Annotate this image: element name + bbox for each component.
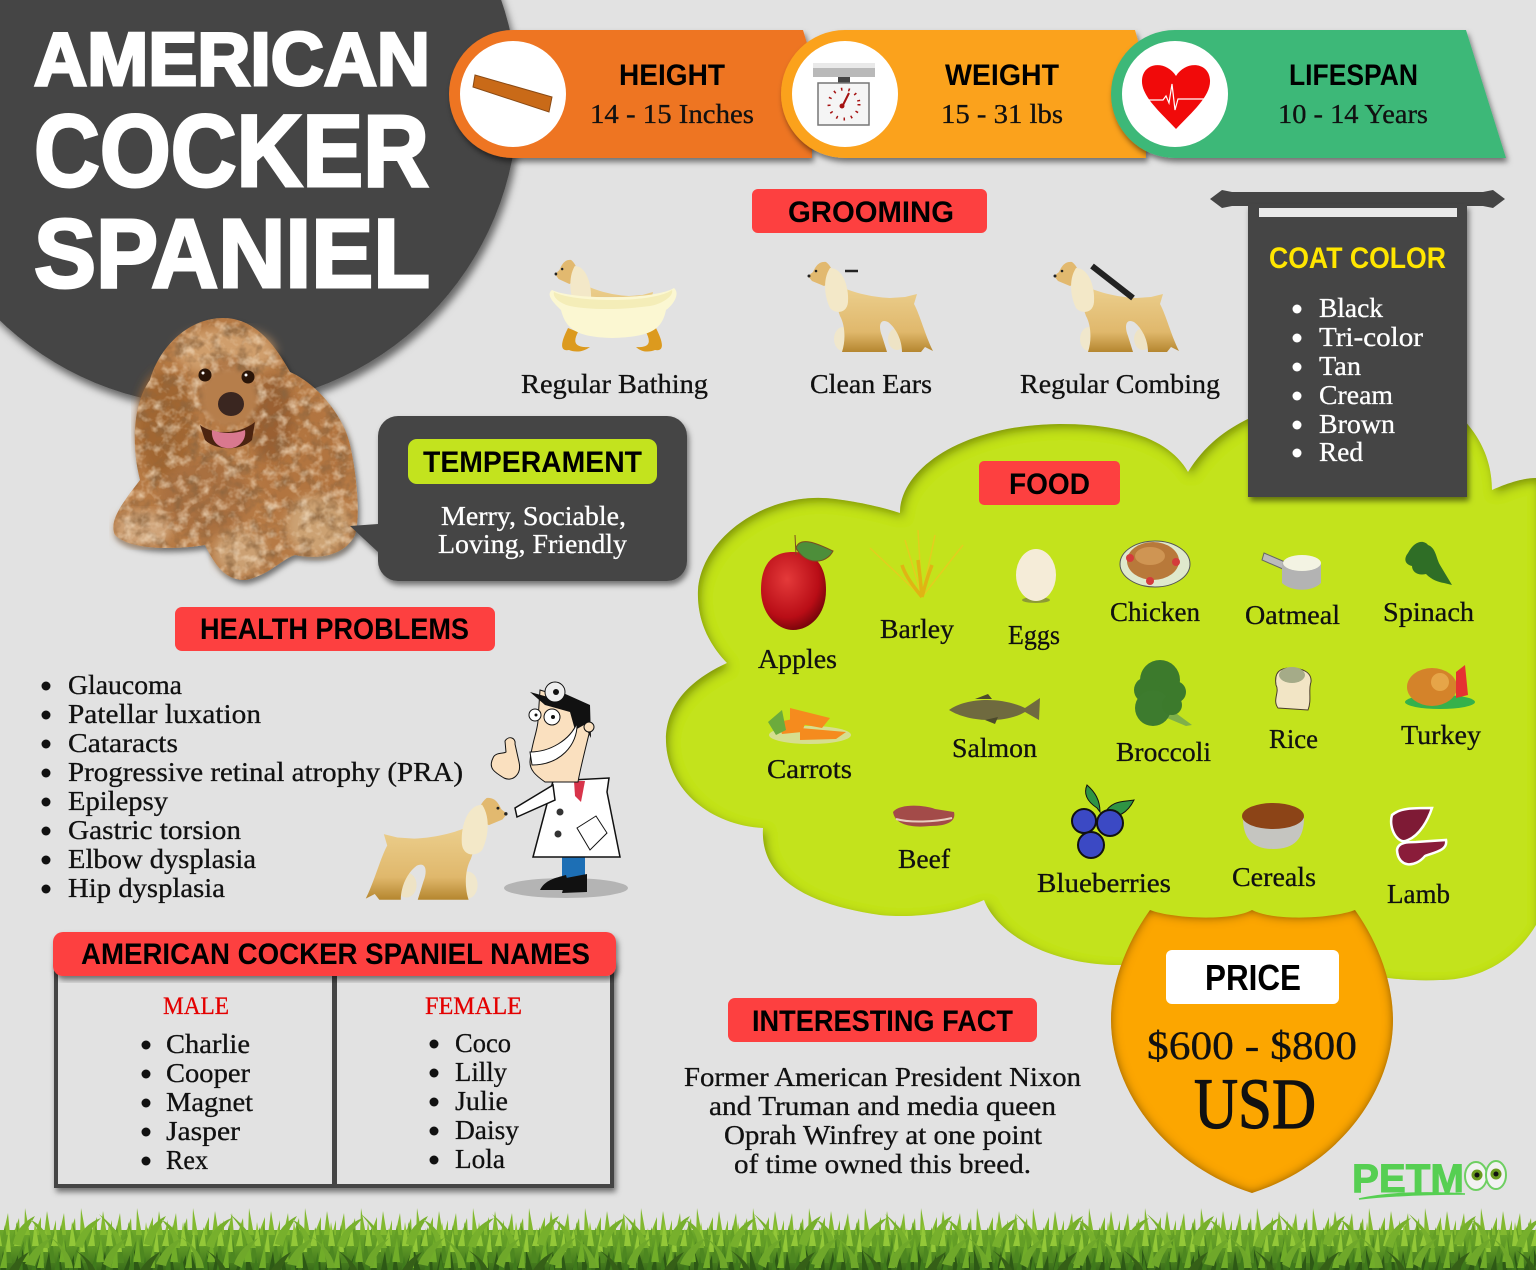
panel: interesting fact [684,998,1082,1179]
male names: Jasper [166,1116,240,1146]
female names [425,993,522,1174]
grooming: bathing: Regular Bathing [521,369,708,399]
panel: coat color: COAT COLOR [1269,242,1446,275]
food: turkey: Turkey [1401,720,1482,750]
food: chicken [1110,541,1200,627]
price shield: $600 - $800 [1147,1023,1357,1068]
male names: MALE [163,993,229,1020]
male names [142,993,254,1175]
icon: dog at vet [366,798,508,900]
dog photo [113,318,358,580]
title text [34,17,430,308]
health list: Cataracts [68,728,178,758]
food: barley: Barley [880,614,954,644]
names heading: AMERICAN COCKER SPANIEL NAMES [81,938,590,971]
food: blueberries: Blueberries [1037,868,1171,898]
food: broccoli [1116,660,1211,767]
male names: Charlie [166,1029,250,1059]
food: apples: Apples [758,644,837,674]
female names: Lola [455,1144,505,1174]
food heading [979,461,1120,505]
food heading: FOOD [1009,468,1090,501]
health list: Glaucoma [68,670,182,700]
fact text: and Truman and media queen [709,1091,1057,1121]
coat color list: Tan [1319,351,1362,381]
coat color list: Red [1319,437,1363,467]
panel: coat color [1210,190,1505,497]
table frame [56,962,612,1186]
grooming: combing: Regular Combing [1020,369,1220,399]
price shield: PRICE [1205,957,1301,998]
food: cereals [1232,803,1316,892]
stat: height: HEIGHT [619,59,725,92]
icon: ruler [473,75,552,112]
coat color list [1292,293,1423,467]
fact heading: INTERESTING FACT [752,1005,1013,1038]
grooming: clean ears: Clean Ears [810,369,932,399]
stats ribbon [449,30,1506,158]
health list: Hip dysplasia [68,873,225,903]
panel: names table [53,932,616,1186]
food: barley [870,530,963,644]
temperament callout [350,416,687,581]
banner [1248,204,1467,497]
grooming: clean ears [808,262,933,399]
female names: Coco [455,1028,511,1058]
stat: height [449,30,812,158]
stat: lifespan [1111,30,1506,158]
temperament callout: Loving, Friendly [438,529,628,559]
food: spinach [1383,542,1475,627]
food: beef: Beef [898,844,950,874]
female names: FEMALE [425,993,522,1020]
food: apples [758,535,837,674]
grooming heading: GROOMING [788,196,954,229]
food: blueberries [1037,785,1171,898]
stat: lifespan: LIFESPAN [1289,59,1418,92]
icon: cartoon doctor [491,682,628,898]
dark title circle [0,0,518,406]
title block [0,0,518,406]
fact text: Oprah Winfrey at one point [724,1120,1043,1150]
fact heading [728,998,1037,1042]
stat: weight [781,30,1146,158]
health list: Gastric torsion [68,815,242,845]
grass strip [0,1205,1536,1270]
food: oatmeal: Oatmeal [1245,600,1340,630]
grooming heading [752,189,987,233]
health list: Epilepsy [68,786,169,816]
food: salmon [949,694,1040,763]
male names: Cooper [166,1058,250,1088]
food: salmon: Salmon [952,733,1038,763]
coat color list: Black [1319,293,1384,323]
coat color list: Tri-color [1319,322,1423,352]
food: carrots: Carrots [767,754,852,784]
stat: weight: 15 - 31 lbs [941,99,1063,129]
temperament callout: TEMPERAMENT [423,446,642,479]
female names: Lilly [455,1057,507,1087]
food: rice: Rice [1269,724,1318,754]
health list: Patellar luxation [68,699,262,729]
stat: weight: WEIGHT [945,59,1059,92]
stat: height: 14 - 15 Inches [590,99,754,129]
coat color list: Brown [1319,409,1396,439]
food: turkey [1401,665,1482,750]
hanging rod [1210,190,1505,208]
panel: grooming [521,189,1220,399]
panel: health problems [42,607,628,903]
price shield: USD [1194,1064,1316,1144]
food: lamb: Lamb [1387,879,1450,909]
names heading [53,932,616,976]
fact text: of time owned this breed. [734,1149,1031,1179]
fact text [684,1062,1082,1179]
health heading: HEALTH PROBLEMS [200,613,469,646]
male names: Rex [166,1145,208,1175]
grooming: combing [1020,262,1220,399]
food: rice [1269,667,1318,754]
female names: Julie [455,1086,508,1116]
logo: petmoo: PETM [1352,1157,1464,1201]
fact text: Former American President Nixon [684,1062,1082,1092]
food cloud shape [666,400,1536,980]
male names: Magnet [166,1087,254,1117]
panel: food [666,400,1536,980]
health list: Elbow dysplasia [68,844,256,874]
food: spinach: Spinach [1383,597,1475,627]
health list: Progressive retinal atrophy (PRA) [68,757,463,787]
title text: COCKER [34,94,429,208]
title text: SPANIEL [34,199,430,308]
food: eggs: Eggs [1008,620,1060,650]
food: eggs [1008,549,1060,650]
temperament callout: Merry, Sociable, [441,501,626,531]
food: beef [893,806,954,874]
title text: AMERICAN [34,17,430,101]
food: oatmeal [1245,553,1340,630]
icon: kitchen scale [813,63,875,125]
food: carrots [767,708,852,784]
price shield [1111,910,1393,1193]
food: chicken: Chicken [1110,597,1200,627]
health list [42,670,463,903]
icon: heart with pulse [1142,65,1210,129]
female names: Daisy [455,1115,519,1145]
food: lamb [1387,808,1450,909]
health heading [175,607,495,651]
coat color list: Cream [1319,380,1393,410]
food: cereals: Cereals [1232,862,1316,892]
grooming: bathing [521,260,708,399]
food: broccoli: Broccoli [1116,737,1211,767]
stat: lifespan: 10 - 14 Years [1278,99,1428,129]
